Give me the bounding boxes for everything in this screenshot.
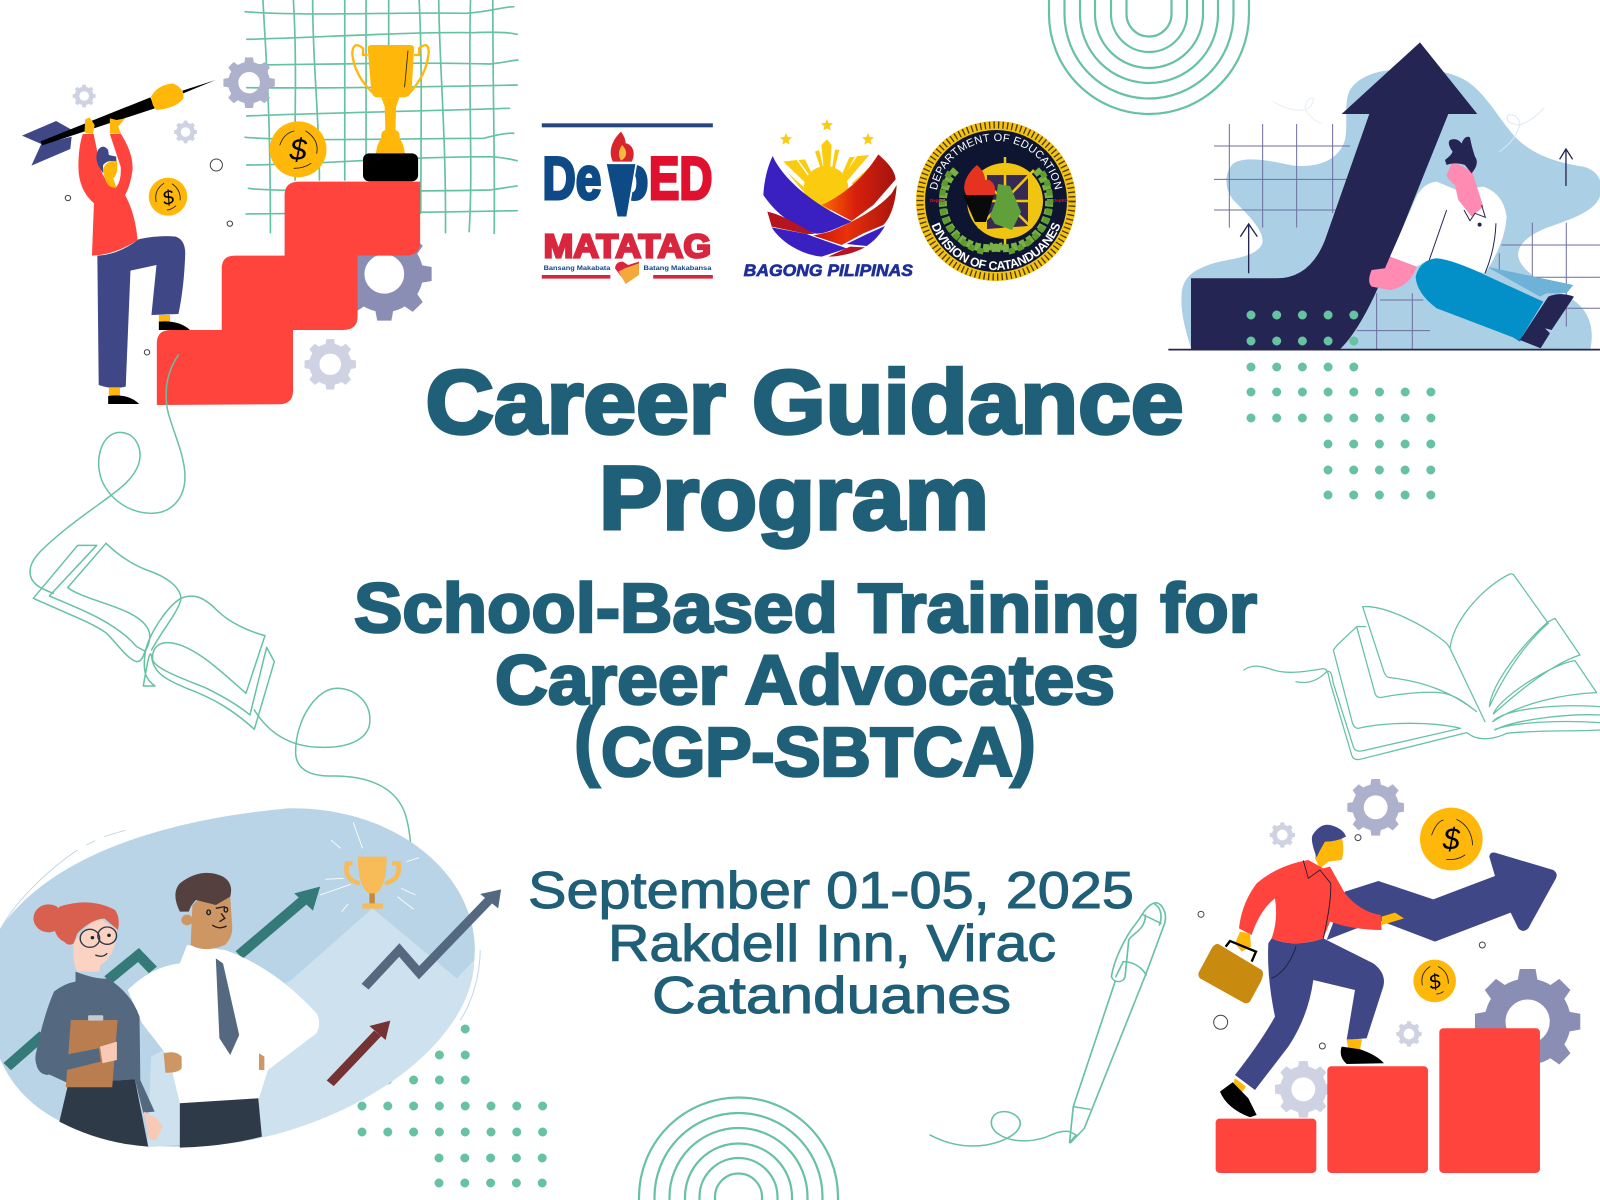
woman [33, 902, 163, 1147]
stairs [157, 182, 420, 405]
subtitle: ) [1008, 690, 1038, 790]
coins: $ [1442, 822, 1461, 856]
logo: Division of Catanduanes seal: DEPARTMENT OF EDUCATION [930, 133, 1062, 190]
coin small: $ [159, 186, 178, 211]
growth arrow teal [7, 898, 306, 1067]
small arrows [1240, 149, 1573, 273]
concentric arcs top right [1049, 0, 1249, 114]
man [1369, 137, 1574, 348]
coin large: $ [288, 132, 308, 167]
concentric arcs bottom centre [639, 1098, 838, 1200]
subtitle: CGP-SBTCA [601, 713, 1013, 791]
logo: Division of Catanduanes seal: DepED [930, 198, 946, 203]
logo: Bagong Pilipinas [744, 119, 913, 280]
date and venue: September 01-05, 2025 [528, 862, 1134, 920]
open book right [1244, 574, 1600, 760]
illustration: team with growth arrows [0, 808, 501, 1148]
squiggle and open book left [30, 355, 412, 883]
ribbons [822, 154, 896, 221]
oval background [0, 808, 475, 1147]
date and venue [528, 862, 1134, 1025]
illustration: man pushing arrow [1168, 42, 1600, 351]
climbing man [1198, 825, 1404, 1117]
trophy [346, 857, 399, 909]
grid lines [1214, 124, 1600, 349]
logo: DepED MATATAG: MATATAG [544, 228, 711, 265]
logo: DepED MATATAG [542, 123, 713, 284]
subtitle: ( [572, 690, 602, 790]
subtitle [354, 569, 1257, 791]
dot pattern bottom left [362, 1029, 546, 1183]
big gear [337, 227, 432, 321]
brush strokes around oval [0, 830, 480, 1020]
man [128, 873, 319, 1148]
big up arrow [1191, 42, 1477, 349]
illustration: woman climbing stairs with dart [22, 0, 518, 405]
faint squiggles [1273, 98, 1322, 124]
coins [1413, 808, 1483, 1002]
logo: DepED MATATAG: p [613, 146, 649, 212]
title: Career Guidance [426, 353, 1184, 453]
growth arrow slate [365, 900, 489, 987]
base line [1168, 347, 1600, 352]
bars [1216, 1028, 1540, 1173]
logo: Division of Catanduanes seal: DIVISION OF CATANDUANES [932, 222, 1060, 270]
coins: $ [1425, 969, 1444, 995]
logo: DepED MATATAG: ED [649, 146, 712, 212]
grid lines [245, 0, 518, 233]
illustration: man climbing bars with arrow [1198, 779, 1580, 1173]
small rings [65, 159, 233, 355]
title [426, 353, 1184, 549]
pen with squiggle [930, 903, 1165, 1146]
title: Program [599, 449, 989, 549]
gears [73, 57, 356, 390]
small rings [1198, 835, 1485, 1049]
arrow [1327, 852, 1557, 942]
logo: Division of Catanduanes seal: DepED [1053, 198, 1069, 203]
logo: DepED MATATAG: Bansang Makabata [544, 265, 611, 272]
blob [1181, 69, 1600, 351]
growth arrow maroon [330, 1033, 378, 1083]
coin large [270, 121, 327, 177]
subtitle: Career Advocates [495, 641, 1115, 719]
coin small [149, 178, 187, 216]
logo: Division of Catanduanes seal [916, 121, 1076, 281]
dart [22, 80, 216, 166]
logo: DepED MATATAG: De [542, 146, 601, 212]
mountain [147, 908, 474, 1147]
logo: DepED MATATAG: Batang Makabansa [644, 265, 712, 272]
stars and sun [780, 119, 874, 211]
trophy [352, 45, 429, 181]
subtitle: School-Based Training for [354, 569, 1257, 647]
date and venue: Catanduanes [652, 967, 1011, 1025]
date and venue: Rakdell Inn, Virac [608, 915, 1056, 973]
logo: Bagong Pilipinas: BAGONG PILIPINAS [744, 261, 913, 280]
dot pattern top right [1251, 315, 1432, 495]
shine rays [320, 822, 419, 912]
gears [1270, 779, 1580, 1118]
woman figure [78, 117, 190, 404]
